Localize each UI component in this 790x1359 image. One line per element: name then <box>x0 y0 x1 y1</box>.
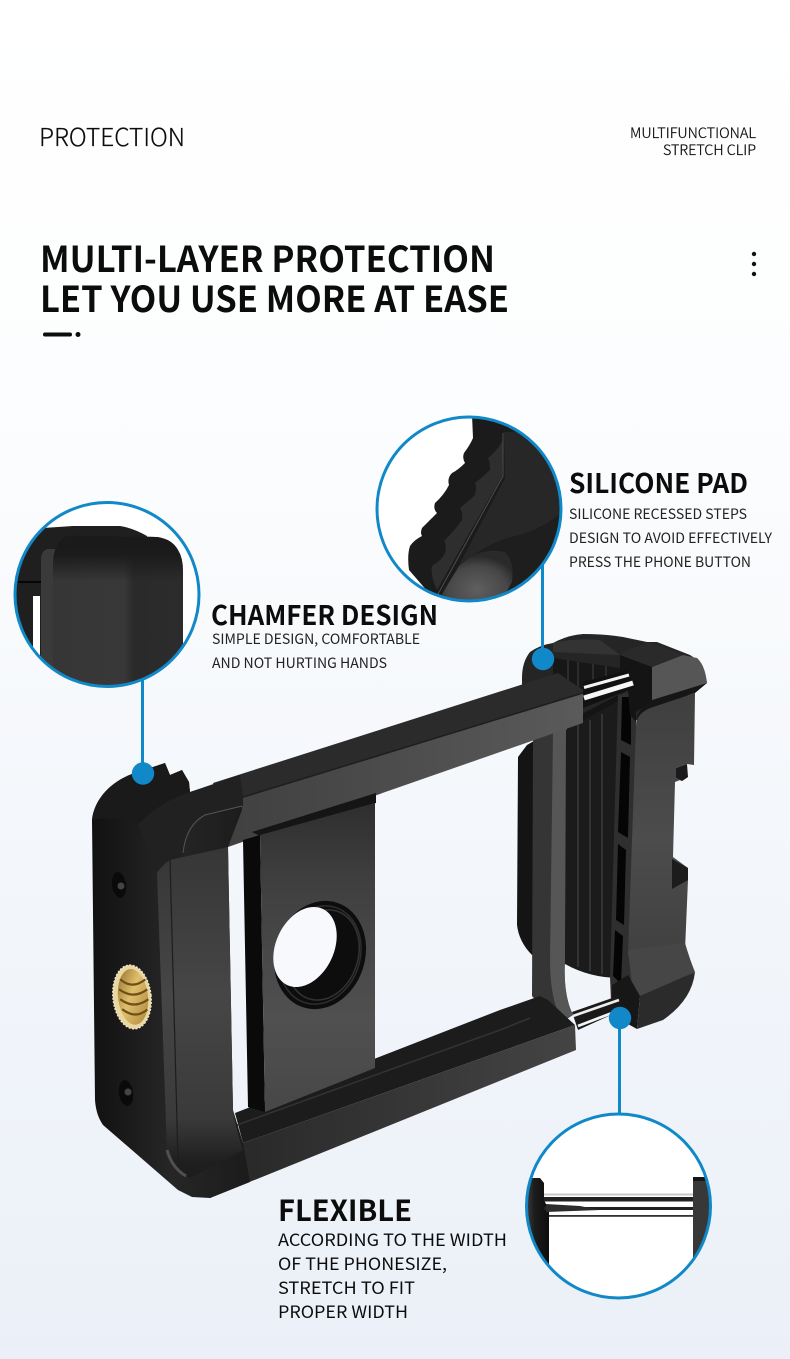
title: MULTI-LAYER PROTECTION <box>40 231 495 283</box>
tab on clamp <box>676 764 688 781</box>
right clamp neck <box>620 655 652 722</box>
connector line: flexible <box>609 1007 631 1114</box>
callout: flexible: OF THE PHONESIZE, <box>278 1250 447 1275</box>
left block <box>92 763 250 1198</box>
connector line: chamfer <box>132 678 154 785</box>
corner sleeve <box>138 776 243 873</box>
detail circle: silicone pad <box>377 415 570 610</box>
callout: silicone pad: PRESS THE PHONE BUTTON <box>569 552 751 572</box>
front face <box>157 847 243 1178</box>
top bar <box>183 673 583 858</box>
ellipsis dots <box>752 252 756 276</box>
callout: silicone pad: SILICONE PAD <box>569 462 748 501</box>
bottom rods <box>572 996 622 1030</box>
callout: chamfer design <box>211 594 438 673</box>
product label: MULTIFUNCTIONAL <box>630 123 756 143</box>
right clamp back cap <box>522 634 707 720</box>
detail circle: flexible rods <box>520 1114 720 1300</box>
callout: flexible <box>278 1188 507 1323</box>
mounting plate <box>260 803 375 1112</box>
top rods <box>583 670 634 708</box>
brass threaded insert <box>110 963 154 1031</box>
right clamp top face <box>652 655 707 700</box>
callout: flexible: FLEXIBLE <box>278 1188 412 1230</box>
title underline mark <box>43 332 80 337</box>
callout: chamfer design: SIMPLE DESIGN, COMFORTABLE <box>212 629 420 649</box>
callout: chamfer design: AND NOT HURTING HANDS <box>212 653 387 673</box>
phone clip product illustration <box>92 634 707 1198</box>
product label <box>630 123 756 160</box>
inner gray strips <box>532 728 573 1025</box>
callout: flexible: STRETCH TO FIT <box>278 1274 415 1299</box>
connector line: silicone <box>532 564 554 670</box>
ridged center <box>565 700 620 978</box>
screw bottom <box>117 1079 135 1107</box>
plate shadow <box>252 793 376 836</box>
callout: flexible: PROPER WIDTH <box>278 1298 408 1323</box>
right clamp lower foot <box>628 943 695 998</box>
callout: silicone pad <box>569 462 773 572</box>
black strip beside plate <box>243 835 265 1112</box>
shadow band under top face <box>636 683 707 726</box>
callout: silicone pad: SILICONE RECESSED STEPS <box>569 504 747 524</box>
title: LET YOU USE MORE AT EASE <box>40 271 509 323</box>
screw top <box>110 871 128 899</box>
product label: STRETCH CLIP <box>663 140 756 160</box>
bottom bar <box>190 996 576 1198</box>
section label: protection: PROTECTION <box>39 118 185 154</box>
detail circle: chamfer <box>12 502 199 700</box>
lower tab on clamp <box>672 859 688 889</box>
callout: silicone pad: DESIGN TO AVOID EFFECTIVELY <box>569 528 773 548</box>
slot column <box>610 690 636 1002</box>
callout: flexible: ACCORDING TO THE WIDTH <box>278 1226 507 1251</box>
callout: chamfer design: CHAMFER DESIGN <box>211 594 438 633</box>
top corner highlight <box>92 763 190 824</box>
threaded ring <box>260 889 380 1021</box>
lower corner highlight <box>167 1150 186 1176</box>
right clamp back plate <box>517 693 636 980</box>
title <box>40 231 509 323</box>
right clamp interior ridges <box>553 639 620 700</box>
right clamp gray side panel <box>628 693 695 985</box>
